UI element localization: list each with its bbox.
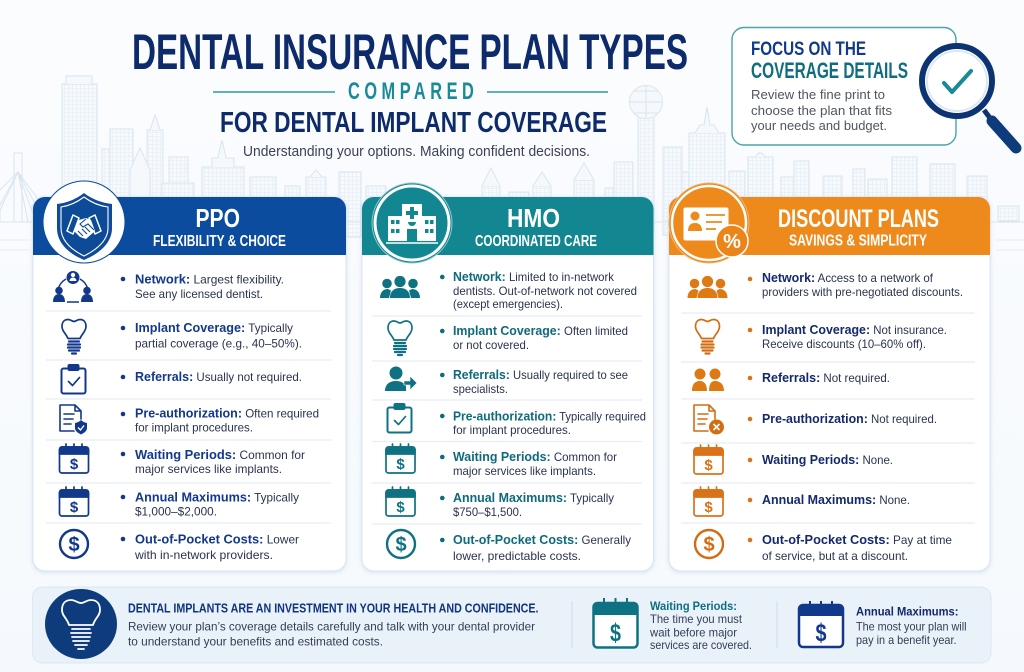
row: pre-authorization: Pre-authorization: Often required: [135, 406, 319, 421]
icon: implant: [696, 320, 720, 354]
subheading: compared: COMPARED: [348, 78, 474, 105]
annual maximums note: Annual Maximums:: [856, 605, 958, 619]
icon: dollar coin: [695, 530, 723, 558]
row: referrals: [62, 365, 302, 394]
row: waiting periods: Waiting Periods: None.: [762, 452, 893, 467]
row dividers: [372, 316, 642, 524]
annual maximums note: pay in a benefit year.: [856, 633, 956, 647]
row: annual maximums: [60, 487, 299, 519]
tagline: Understanding your options. Making confident decisions.: [243, 144, 590, 160]
waiting periods note: wait before major: [649, 626, 737, 640]
icon: dollar coin: [387, 530, 415, 558]
row: annual maximums: [694, 487, 910, 516]
row: referrals: specialists.: [453, 382, 508, 396]
row: out-of-pocket costs: [695, 530, 952, 563]
row dividers: [46, 311, 331, 523]
waiting periods note: [594, 598, 752, 652]
callout: coverage details: choose the plan that fits: [751, 103, 893, 118]
row: pre-authorization: for implant procedures.: [135, 421, 253, 435]
HMO header: COORDINATED CARE: [475, 233, 597, 250]
row: out-of-pocket costs: with in-network providers.: [134, 548, 273, 562]
row: pre-authorization: [694, 405, 937, 434]
row: implant coverage: [62, 320, 302, 354]
row: network: See any licensed dentist.: [135, 287, 263, 301]
icon: calendar: [386, 487, 415, 516]
row: network: [380, 269, 637, 311]
callout: coverage details: your needs and budget.: [751, 118, 887, 133]
row: waiting periods: Waiting Periods: Common for: [453, 449, 617, 464]
row: implant coverage: Implant Coverage: Not insurance.: [762, 322, 947, 337]
footer band: [32, 587, 991, 663]
row: out-of-pocket costs: lower, predictable costs.: [453, 549, 581, 563]
discount header: [669, 197, 990, 255]
row: network: Network: Limited to in-network: [453, 269, 615, 284]
skyline illustration: [0, 76, 1024, 250]
row: annual maximums: [386, 487, 614, 519]
icon: calendar: [60, 444, 88, 473]
PPO header: [33, 197, 346, 255]
icon: discount card: %: [723, 231, 741, 253]
row: annual maximums: $750–$1,500.: [453, 505, 522, 519]
row: out-of-pocket costs: Out-of-Pocket Costs: Pay at time: [762, 532, 952, 547]
icon: discount card: [669, 183, 749, 263]
row: annual maximums: Annual Maximums: Typically: [453, 490, 614, 505]
icon: teal calendar: [594, 598, 638, 648]
investment message: [128, 602, 538, 649]
icon: document with x: [694, 405, 724, 434]
row: network: [53, 271, 284, 302]
PPO rows: bullets: [121, 277, 125, 541]
row: network: [688, 270, 963, 299]
row: waiting periods: Waiting Periods: Common for: [135, 447, 305, 462]
row: implant coverage: Implant Coverage: Typically: [135, 320, 293, 335]
waiting periods note: Waiting Periods:: [650, 599, 737, 613]
row: pre-authorization: [60, 405, 319, 435]
row: referrals: [692, 368, 890, 391]
row: pre-authorization: [388, 404, 646, 437]
icon: people: [688, 276, 728, 298]
panel: HMO: [362, 183, 654, 571]
row: referrals: [385, 366, 628, 396]
annual maximums note: [799, 601, 966, 647]
row: pre-authorization: Pre-authorization: Typically required: [453, 409, 646, 424]
row: waiting periods: [694, 445, 893, 474]
icon: clipboard: [388, 404, 412, 432]
row: out-of-pocket costs: Out-of-Pocket Costs: Generally: [453, 532, 631, 547]
row: waiting periods: major services like implants.: [453, 464, 596, 478]
HMO rows: bullets: [440, 275, 445, 542]
discount rows: bullets: [748, 277, 752, 542]
icon: implant: [388, 321, 412, 355]
row: implant coverage: Implant Coverage: Often limited: [453, 323, 628, 338]
discount header: DISCOUNT PLANS: [778, 205, 939, 233]
icon: calendar: [694, 487, 723, 516]
row: referrals: Referrals: Not required.: [762, 370, 890, 385]
icon: dollar coin: [60, 530, 88, 558]
row: out-of-pocket costs: of service, but at a discount.: [762, 549, 908, 563]
row: implant coverage: partial coverage (e.g., 40–50%).: [135, 336, 302, 350]
row: waiting periods: [60, 444, 305, 476]
callout: coverage details: Review the fine print to: [751, 87, 885, 102]
row: implant coverage: Receive discounts (10–60% off).: [762, 337, 926, 351]
PPO header: PPO: [196, 203, 240, 233]
row: out-of-pocket costs: [60, 530, 299, 562]
title: [132, 24, 688, 160]
icon: network: [53, 271, 93, 302]
annual maximums note: The most your plan will: [856, 620, 966, 634]
row: pre-authorization: for implant procedures.: [453, 423, 571, 437]
row: waiting periods: [386, 444, 617, 478]
icon: two people: [692, 368, 724, 391]
row dividers: [681, 313, 975, 523]
icon: teal calendar: $: [610, 619, 621, 647]
row: network: dentists. Out-of-network not covered: [453, 284, 637, 298]
HMO header: HMO: [507, 203, 560, 233]
row: network: (except emergencies).: [453, 297, 563, 311]
row: implant coverage: or not covered.: [453, 338, 529, 352]
callout: coverage details: COVERAGE DETAILS: [751, 58, 908, 83]
icon: shield with handshake: [43, 181, 125, 263]
row: referrals: Referrals: Usually not required.: [135, 369, 302, 384]
waiting periods note: services are covered.: [650, 638, 752, 652]
row: implant coverage: [696, 320, 947, 354]
callout: coverage details: [732, 28, 1016, 148]
discount header: SAVINGS & SIMPLICITY: [789, 232, 928, 250]
panel: discount plans: [669, 183, 990, 571]
row: waiting periods: major services like implants.: [135, 462, 282, 476]
icon: implant: [62, 320, 86, 354]
row: referrals: Referrals: Usually required to see: [453, 367, 628, 382]
icon: calendar: [694, 445, 723, 474]
row: pre-authorization: Pre-authorization: Not required.: [762, 411, 937, 426]
PPO header: FLEXIBILITY & CHOICE: [153, 233, 286, 250]
row: out-of-pocket costs: Out-of-Pocket Costs: Lower: [135, 532, 299, 547]
row: annual maximums: Annual Maximums: Typically: [135, 490, 299, 505]
icon: navy calendar: [799, 601, 843, 647]
investment message: DENTAL IMPLANTS ARE AN INVESTMENT IN YOUR HEALTH AND CONFIDENCE.: [128, 602, 538, 616]
row: network: providers with pre-negotiated discounts.: [762, 285, 963, 299]
panel: PPO: [33, 181, 346, 571]
row: implant coverage: [388, 321, 628, 355]
icon: navy calendar: $: [816, 619, 827, 647]
icon: document with shield: [60, 405, 87, 434]
investment message: Review your plan’s coverage details carefully and talk with your dental provider: [128, 620, 535, 634]
icon: magnifying glass: [922, 46, 1016, 148]
row: annual maximums: $1,000–$2,000.: [135, 505, 217, 519]
row: network: Network: Access to a network of: [762, 270, 934, 285]
icon: clipboard: [62, 365, 86, 394]
icon: implant on navy disc: [45, 589, 117, 659]
subheading: for dental implant coverage: FOR DENTAL IMPLANT COVERAGE: [220, 107, 607, 139]
row: annual maximums: Annual Maximums: None.: [762, 492, 910, 507]
row: out-of-pocket costs: [387, 530, 631, 563]
icon: hospital: [372, 183, 452, 263]
icon: person with arrow: [385, 366, 417, 391]
waiting periods note: The time you must: [650, 612, 743, 626]
main heading: DENTAL INSURANCE PLAN TYPES: [132, 24, 688, 80]
HMO header: [362, 197, 654, 255]
icon: calendar: [386, 444, 415, 473]
callout: coverage details: FOCUS ON THE: [751, 39, 866, 60]
row: network: Network: Largest flexibility.: [135, 272, 284, 286]
investment message: to understand your benefits and estimated costs.: [128, 635, 383, 649]
icon: calendar: [60, 487, 88, 516]
icon: people: [380, 276, 420, 298]
